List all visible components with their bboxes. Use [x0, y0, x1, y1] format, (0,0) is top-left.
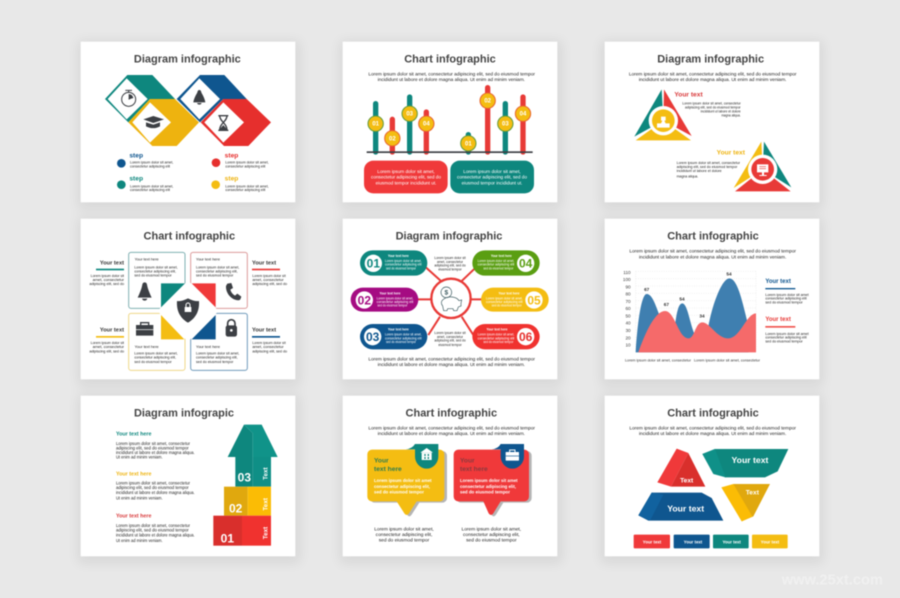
- area chart: 60: [625, 306, 631, 311]
- step: teal: step: [129, 176, 143, 183]
- cards and central diamond: [129, 252, 247, 370]
- card text: top left: [134, 258, 178, 277]
- intro text: Lorem ipsum dolor sit amet, consectetur adipiscing elit, sed do eiusmod tempor: [629, 248, 796, 254]
- step: teal: [117, 176, 173, 192]
- text: below centre: [434, 331, 466, 347]
- text block: yellow: [116, 471, 195, 500]
- intro text: incididunt ut labore et dolore magna aliqua. Ut enim ad minim veniam.: [378, 431, 525, 437]
- intro text: incididunt ut labore et dolore magna aliqua. Ut enim ad minim veniam.: [639, 431, 786, 437]
- side label: bottom left: [89, 327, 125, 353]
- stepped arrow chart: Text: [262, 467, 269, 480]
- text: first triangle: incididunt ut labore et dolore: [701, 109, 741, 113]
- area chart: 40: [625, 321, 631, 326]
- panel: diagram infographic, stepped arrow: [81, 396, 295, 556]
- callout: teal: consectetur adipiscing elit, sed do: [457, 175, 527, 180]
- step: blue: [117, 152, 173, 168]
- panel: diagram infographic, triangles: [605, 42, 819, 202]
- side label: bottom left: Your text: [100, 327, 124, 333]
- stepped arrow chart: 03: [238, 471, 251, 485]
- side label: top left: Lorem ipsum dolor sit: [91, 274, 124, 278]
- pill 02: Lorem ipsum dolor sit amet,: [377, 296, 413, 300]
- icon: bell: [193, 90, 205, 105]
- step: teal: Lorem ipsum dolor sit amet,: [130, 184, 173, 188]
- card text: bottom right: [196, 345, 239, 364]
- pill 05: Lorem ipsum dolor sit amet,: [486, 296, 523, 300]
- callout: teal: eiusmod tempor incididunt ut.: [462, 180, 522, 185]
- pill 02: consectetur adipiscing elit: [377, 300, 413, 304]
- text: first triangle: Lorem ipsum dolor sit amet, consectetur: [682, 102, 741, 106]
- intro text: Lorem ipsum dolor sit amet, consectetur adipiscing elit, sed do eiusmod tempor: [629, 426, 796, 432]
- side label: top right: Lorem ipsum dolor sit: [252, 274, 286, 278]
- text: second triangle: Your text: [717, 150, 746, 157]
- intro text: [629, 426, 796, 437]
- pill 01: 01: [367, 257, 380, 271]
- panel: diagram infographic, four diamonds: [81, 42, 295, 202]
- legend: Your text: [722, 539, 741, 544]
- text: below centre: Lorem ipsum dolor sit: [434, 331, 466, 335]
- intro text: [368, 426, 535, 437]
- pill 04: sed do eiusmod tempor: [483, 266, 513, 270]
- card text: top right: sed do eiusmod tempor: [196, 273, 234, 277]
- text: second triangle: incididunt ut labore et dolore: [677, 169, 722, 173]
- stepped arrow chart: Text: [262, 497, 269, 511]
- callout: red: [364, 161, 448, 193]
- legend: Your text: [643, 539, 662, 544]
- chart caption: Lorem ipsum dolor sit amet, consectetur: [694, 357, 761, 362]
- pill 03: sed do eiusmod tempor: [386, 340, 416, 344]
- caption: right: Lorem ipsum dolor sit amet,: [462, 526, 521, 532]
- panel: chart infographic, pyramid pieces: [605, 396, 883, 589]
- intro text: Lorem ipsum dolor sit amet, consectetur adipiscing elit, sed do eiusmod tempor: [368, 426, 535, 432]
- panel: diagram infographic, six pills: [343, 219, 557, 379]
- step: blue: Lorem ipsum dolor sit amet,: [130, 161, 173, 165]
- pill 05: [481, 288, 549, 312]
- piece: teal trapezoid: [702, 449, 788, 477]
- centre ring with piggy bank icon: [431, 279, 471, 318]
- caption: right: sed do eiusmod tempor: [466, 538, 517, 544]
- legend: red series: consectetur adipiscing elit: [765, 336, 807, 340]
- card text: top right: Lorem ipsum dolor sit amet,: [196, 265, 239, 269]
- text block: red: [116, 514, 195, 543]
- callout: teal: [450, 161, 534, 193]
- intro text: incididunt ut labore et dolore magna aliqua. Ut enim ad minim veniam.: [378, 77, 525, 83]
- triangle diagram two: [734, 142, 791, 191]
- text: first triangle: adipiscing elit, sed do eiusmod tempor: [685, 106, 741, 110]
- legend: Your text: [684, 539, 703, 544]
- side label: top right: adipiscing elit, sed do: [252, 282, 287, 286]
- side label: bottom left: Lorem ipsum dolor sit: [91, 341, 124, 345]
- stepped arrow chart: 02: [229, 501, 243, 515]
- legend: red series: Your text: [765, 317, 791, 323]
- pill 06: consectetur adipiscing elit: [478, 336, 514, 340]
- piece: red triangle: Text: [680, 477, 694, 484]
- legend: red series: Lorem ipsum dolor sit amet: [765, 332, 809, 336]
- area chart: [623, 270, 756, 352]
- diamond chain: [105, 75, 271, 146]
- area chart: 80: [625, 292, 631, 297]
- area chart: 54: [679, 296, 685, 301]
- card text: bottom left: Your text here: [135, 345, 159, 349]
- pill 06: 06: [519, 330, 533, 344]
- area chart: 67: [664, 302, 669, 307]
- caption: right: [462, 526, 521, 544]
- title: Chart infographic: [144, 230, 235, 242]
- lollipop bar chart: 01: [465, 141, 472, 147]
- card text: bottom right: sed do eiusmod tempor: [196, 360, 234, 364]
- pill 02: sed do eiusmod tempor: [377, 304, 407, 308]
- step: yellow: [211, 176, 269, 192]
- side label: top left: amet, consectetur: [93, 278, 125, 282]
- text: second triangle: magna aliqua.: [677, 174, 698, 178]
- icon: shield with lock: [177, 298, 199, 323]
- area chart: 10: [625, 343, 631, 348]
- card text: top right: Your text here: [196, 258, 220, 262]
- title: Chart infographic: [406, 408, 497, 420]
- card text: top left: sed do eiusmod tempor: [134, 273, 172, 277]
- triangle diagram one: [634, 89, 692, 140]
- pill 01: Lorem ipsum dolor sit amet,: [385, 259, 422, 263]
- text block: yellow: Lorem ipsum dolor sit amet, consectetur: [116, 480, 191, 485]
- side label: top right: Your text: [252, 260, 276, 266]
- callout: teal: Lorem ipsum dolor sit amet,: [463, 169, 521, 174]
- text block: yellow: Your text here: [116, 471, 151, 477]
- callout: red: eiusmod tempor incididunt ut.: [376, 180, 436, 185]
- icon: padlock: [226, 320, 237, 337]
- text: first triangle: magna aliqua.: [721, 113, 741, 117]
- footer text: Lorem ipsum dolor sit amet, consectetur adipiscing elit, sed do eiusmod tempor: [368, 356, 535, 362]
- legend: blue series: sed do eiusmod tempor: [765, 300, 803, 304]
- side label: bottom right: amet, consectetur: [252, 345, 285, 349]
- text: first triangle: [674, 92, 741, 117]
- text block: yellow: adipiscing elit, sed do eiusmod tempor: [116, 485, 189, 490]
- text block: red: Ut enim ad minim veniam.: [116, 538, 163, 543]
- text: above centre: adipiscing elit, sed do: [434, 264, 466, 268]
- piece: yellow triangle: Text: [746, 490, 760, 497]
- icon: bell: [138, 282, 152, 301]
- text: below centre: adipiscing elit, sed do: [434, 339, 466, 343]
- step: teal: consectetur adipiscing elit: [130, 188, 170, 192]
- card text: top right: [196, 258, 239, 277]
- pill 04: 04: [519, 257, 533, 271]
- area chart: 90: [625, 284, 631, 289]
- card text: bottom left: consectetur adipiscing elit,: [134, 356, 176, 360]
- icon: hourglass: [218, 116, 228, 130]
- step: red: Lorem ipsum dolor sit amet,: [225, 161, 269, 165]
- footer text: incididunt ut labore et dolore magna aliqua. Ut enim ad minim veniam.: [378, 362, 525, 368]
- pill 04: Your text here: [491, 254, 512, 258]
- text: second triangle: [677, 150, 746, 178]
- lollipop bar chart: 04: [520, 112, 527, 118]
- card text: bottom right: consectetur adipiscing elit,: [196, 356, 238, 360]
- pill 01: Your text here: [388, 254, 409, 258]
- caption: left: [374, 526, 434, 544]
- area chart: 50: [625, 313, 631, 318]
- panel: chart infographic, area chart: [605, 219, 819, 379]
- text: above centre: Lorem ipsum dolor sit: [434, 256, 466, 260]
- pill 01: [360, 250, 427, 276]
- lollipop bar chart: 02: [484, 99, 492, 105]
- step: yellow: Lorem ipsum dolor sit amet,: [225, 184, 269, 188]
- piece: blue trapezoid: [638, 493, 723, 521]
- card text: bottom left: Lorem ipsum dolor sit amet,: [134, 352, 178, 356]
- stepped arrow chart: Text: [262, 526, 269, 539]
- pill 03: consectetur adipiscing elit: [385, 336, 422, 340]
- intro text: incididunt ut labore et dolore magna aliqua. Ut enim ad minim veniam.: [639, 255, 786, 261]
- intro text: Lorem ipsum dolor sit amet, consectetur adipiscing elit, sed do eiusmod tempor: [368, 71, 535, 77]
- step: blue: step: [129, 152, 143, 159]
- icon: stopwatch: [122, 90, 136, 106]
- title: Chart infographic: [667, 408, 759, 420]
- speech bubble: red: [454, 444, 532, 516]
- card text: top left: Your text here: [135, 258, 159, 262]
- step: red: step: [225, 152, 238, 159]
- title: Chart infographic: [667, 230, 759, 242]
- caption: right: consectetur adipiscing elit,: [463, 532, 520, 538]
- pill 03: Lorem ipsum dolor sit amet,: [385, 333, 422, 337]
- panel: chart infographic, four cards: [81, 219, 295, 379]
- card text: top right: consectetur adipiscing elit,: [196, 269, 238, 273]
- legend: blue series: consectetur adipiscing elit: [765, 297, 807, 301]
- speech bubble: yellow: [367, 444, 447, 516]
- pill 02: [351, 288, 418, 312]
- side label: bottom right: Lorem ipsum dolor sit: [252, 341, 286, 345]
- text block: red: adipiscing elit, sed do eiusmod tempor: [116, 528, 189, 533]
- legend: blue series: [765, 279, 809, 304]
- callout: red: Lorem ipsum dolor sit amet,: [377, 169, 435, 174]
- legend: red series: sed do eiusmod tempor: [765, 340, 803, 344]
- lollipop bar chart: 02: [389, 136, 396, 142]
- card text: bottom right: Lorem ipsum dolor sit amet,: [196, 352, 239, 356]
- spokes: [417, 267, 482, 335]
- intro text: [629, 248, 796, 261]
- pill 01: sed do eiusmod tempor: [386, 266, 416, 270]
- card text: bottom left: [134, 345, 178, 364]
- title: Diagram infographic: [396, 230, 502, 242]
- legend: Your text: [761, 539, 780, 544]
- text: second triangle: adipiscing elit, sed do eiusmod tempor: [677, 165, 738, 169]
- legend: [634, 535, 788, 548]
- stepped arrow chart: [213, 425, 278, 546]
- legend: blue series: Lorem ipsum dolor sit amet: [765, 293, 809, 297]
- pill 05: sed do eiusmod tempor: [492, 304, 522, 308]
- text: below centre: amet, consectetur: [437, 335, 464, 339]
- icon: briefcase: [136, 323, 153, 336]
- speech bubble: yellow: consectetur adipiscing elit,: [374, 484, 430, 489]
- text block: teal: adipiscing elit, sed do eiusmod tempor: [116, 445, 189, 450]
- pill 06: Lorem ipsum dolor sit amet,: [478, 333, 514, 337]
- card text: top left: consectetur adipiscing elit,: [134, 269, 176, 273]
- lollipop bar chart: 03: [406, 112, 414, 118]
- callout: red: consectetur adipiscing elit, sed do: [371, 175, 441, 180]
- area chart: 34: [699, 313, 705, 318]
- step: red: consectetur adipiscing elit: [225, 164, 265, 168]
- side label: top left: Your text: [100, 260, 124, 266]
- area chart: 20: [625, 335, 631, 340]
- text block: red: Your text here: [116, 514, 151, 520]
- pill 04: [472, 250, 540, 276]
- intro text: Lorem ipsum dolor sit amet, consectetur adipiscing elit, sed do eiusmod tempor: [629, 71, 797, 77]
- text block: yellow: incididunt ut labore et dolore magna aliqua.: [116, 490, 195, 495]
- card text: bottom left: sed do eiusmod tempor: [134, 360, 172, 364]
- pill 05: Your text here: [498, 292, 520, 296]
- text: second triangle: Lorem ipsum dolor sit amet, consectetur: [677, 161, 741, 165]
- title: Chart infographic: [404, 53, 496, 65]
- legend: red series: [765, 317, 809, 344]
- card text: top left: Lorem ipsum dolor sit amet,: [134, 265, 178, 269]
- text: above centre: eiusmod tempor: [438, 268, 462, 272]
- text: above centre: [434, 256, 466, 272]
- lollipop bar chart: 03: [502, 122, 509, 128]
- icon: phone: [226, 283, 241, 300]
- step: yellow: step: [225, 176, 238, 183]
- piece: teal trapezoid: Your text: [732, 455, 769, 465]
- side label: top right: amet, consectetur: [252, 278, 285, 282]
- lollipop bar chart: 04: [423, 122, 430, 128]
- area chart: 54: [726, 272, 732, 277]
- step: red: [212, 152, 269, 168]
- side label: top left: [89, 260, 125, 286]
- speech bubble: yellow: text here: [374, 466, 402, 473]
- text: first triangle: Your text: [674, 92, 703, 99]
- side label: bottom right: adipiscing elit, sed do: [252, 349, 287, 353]
- title: Diagram infograpic: [134, 408, 234, 420]
- watermark: www.25xt.com: [781, 573, 883, 589]
- stepped arrow chart: 01: [221, 532, 234, 546]
- text: above centre: amet, consectetur: [437, 260, 464, 264]
- area chart: 30: [625, 328, 631, 333]
- pill 03: [360, 324, 427, 349]
- footer text: [368, 356, 535, 368]
- intro text: incididunt ut labore et dolore magna aliqua. Ut enim ad minim veniam.: [639, 77, 786, 83]
- side label: bottom right: Your text: [252, 327, 276, 333]
- speech bubble: red: Your: [460, 457, 475, 464]
- centre ring with piggy bank icon: $: [444, 290, 448, 297]
- caption: left: sed do eiusmod tempor: [379, 538, 430, 544]
- area chart: 70: [625, 299, 631, 304]
- piece: yellow triangle: [721, 484, 770, 521]
- pill 06: Your text here: [486, 327, 508, 331]
- text block: teal: Ut enim ad minim veniam.: [116, 455, 163, 460]
- caption: left: consectetur adipiscing elit,: [376, 532, 432, 538]
- speech bubble: yellow: Your: [374, 457, 389, 464]
- text block: red: Lorem ipsum dolor sit amet, consectetur: [116, 523, 191, 528]
- legend: blue series: Your text: [765, 279, 791, 285]
- pill 03: 03: [366, 330, 380, 344]
- step: blue: consectetur adipiscing elit: [130, 164, 170, 168]
- speech bubble: red: text here: [460, 466, 488, 473]
- intro text: [629, 71, 797, 83]
- speech bubble: yellow: sed do eiusmod tempor: [374, 489, 424, 494]
- step: yellow: consectetur adipiscing elit: [225, 188, 265, 192]
- speech bubble: yellow: Lorem ipsum dolor sit amet: [374, 478, 432, 483]
- lollipop bar chart: [367, 88, 533, 153]
- pill 02: 02: [358, 293, 371, 307]
- pill 05: 05: [527, 293, 541, 307]
- pill 06: sed do eiusmod tempor: [483, 340, 513, 344]
- text block: teal: [116, 432, 195, 460]
- pill 04: Lorem ipsum dolor sit amet,: [478, 259, 514, 263]
- text block: teal: incididunt ut labore et dolore magna aliqua.: [116, 450, 195, 455]
- pill 01: consectetur adipiscing elit: [385, 263, 422, 267]
- area chart: 110: [623, 270, 631, 275]
- intro text: [368, 71, 535, 83]
- speech bubble: red: consectetur adipiscing elit,: [460, 484, 516, 489]
- side label: top left: adipiscing elit, sed do: [89, 282, 124, 286]
- chart caption: Lorem ipsum dolor sit amet, consectetur: [625, 357, 692, 362]
- text block: teal: Lorem ipsum dolor sit amet, consectetur: [116, 441, 191, 446]
- area chart: 100: [623, 277, 631, 282]
- speech bubble: red: Lorem ipsum dolor sit amet: [460, 478, 518, 483]
- lollipop bar chart: 01: [372, 122, 380, 128]
- text: below centre: eiusmod tempor: [438, 343, 462, 347]
- icon: graduation cap: [143, 116, 164, 128]
- caption: left: Lorem ipsum dolor sit amet,: [374, 526, 434, 532]
- side label: top right: [252, 260, 287, 286]
- side label: bottom left: amet, consectetur: [93, 345, 125, 349]
- speech bubble: red: sed do eiusmod tempor: [460, 489, 510, 494]
- text block: yellow: Ut enim ad minim veniam.: [116, 495, 163, 500]
- pill 02: Your text here: [379, 292, 401, 296]
- text block: teal: Your text here: [116, 432, 151, 438]
- piece: red triangle: [657, 449, 705, 487]
- pill 06: [472, 324, 540, 349]
- piece: blue trapezoid: Your text: [667, 503, 704, 513]
- pill 03: Your text here: [388, 327, 409, 331]
- title: Diagram infographic: [657, 53, 764, 65]
- chart caption: [625, 357, 761, 362]
- pill 05: consectetur adipiscing elit: [486, 300, 523, 304]
- title: Diagram infographic: [134, 53, 241, 65]
- side label: bottom left: adipiscing elit, sed do: [89, 349, 124, 353]
- panel: chart infographic, speech bubbles: [343, 396, 557, 556]
- text block: red: incididunt ut labore et dolore magna aliqua.: [116, 532, 195, 537]
- area chart: 67: [644, 287, 650, 292]
- card text: bottom right: Your text here: [196, 345, 220, 349]
- panel: chart infographic, lollipop bars: [343, 42, 557, 202]
- side label: bottom right: [252, 327, 287, 353]
- pill 04: consectetur adipiscing elit: [478, 263, 514, 267]
